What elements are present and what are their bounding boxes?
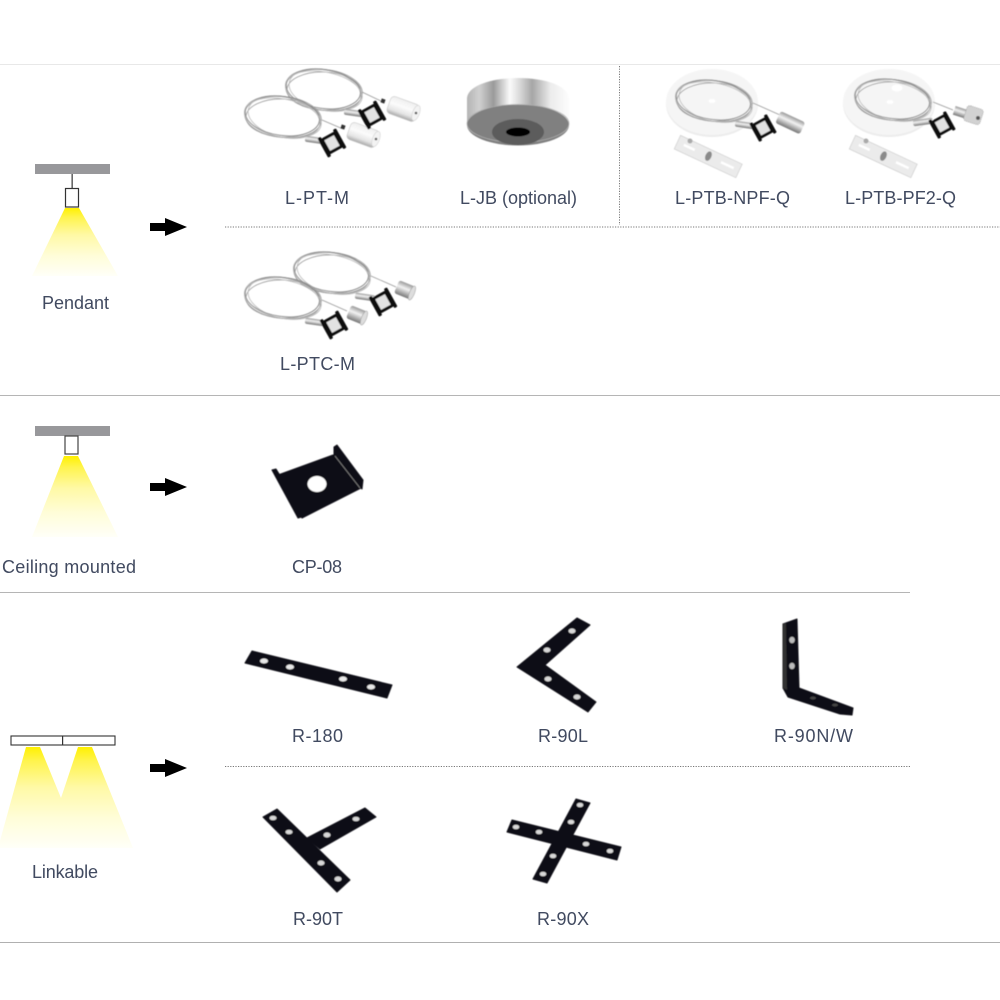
icon: ceiling mounted light [32, 426, 118, 537]
label: R-180: R-180 [292, 726, 343, 746]
arrow: linkable [150, 759, 187, 777]
icon: pendant light [32, 164, 118, 276]
arrow: ceiling mounted [150, 478, 187, 496]
product: L-PTB-NPF-Q [666, 69, 805, 178]
label: R-90T: R-90T [293, 909, 343, 929]
product: L-PTB-PF2-Q [843, 69, 984, 178]
product: L-JB [467, 78, 569, 146]
product: CP-08 [272, 445, 363, 518]
label: L-PTC-M: L-PTC-M [280, 354, 355, 374]
product: L-PTC-M [241, 246, 417, 340]
top rule [0, 64, 1000, 65]
product: R-90X [507, 799, 621, 883]
product: L-PT-M [241, 63, 422, 158]
label: L-PTB-PF2-Q: L-PTB-PF2-Q [845, 188, 956, 208]
label: Ceiling mounted: Ceiling mounted [2, 557, 136, 577]
product: R-90N/W [783, 619, 853, 715]
product: R-90T [263, 808, 376, 892]
arrow: pendant [150, 218, 187, 236]
label: R-90L: R-90L [538, 726, 588, 746]
label: L-PT-M: L-PT-M [285, 188, 349, 208]
product: R-180 [245, 651, 392, 698]
label: R-90N/W: R-90N/W [774, 726, 853, 746]
label: Pendant: Pendant [42, 293, 109, 313]
label: Linkable: Linkable [32, 862, 98, 882]
icon: linkable lights [0, 736, 133, 848]
label: L-JB (optional): L-JB (optional) [460, 188, 577, 208]
product: R-90L [517, 618, 596, 712]
label: R-90X: R-90X [537, 909, 589, 929]
label: L-PTB-NPF-Q: L-PTB-NPF-Q [675, 188, 790, 208]
label: CP-08: CP-08 [292, 557, 342, 577]
